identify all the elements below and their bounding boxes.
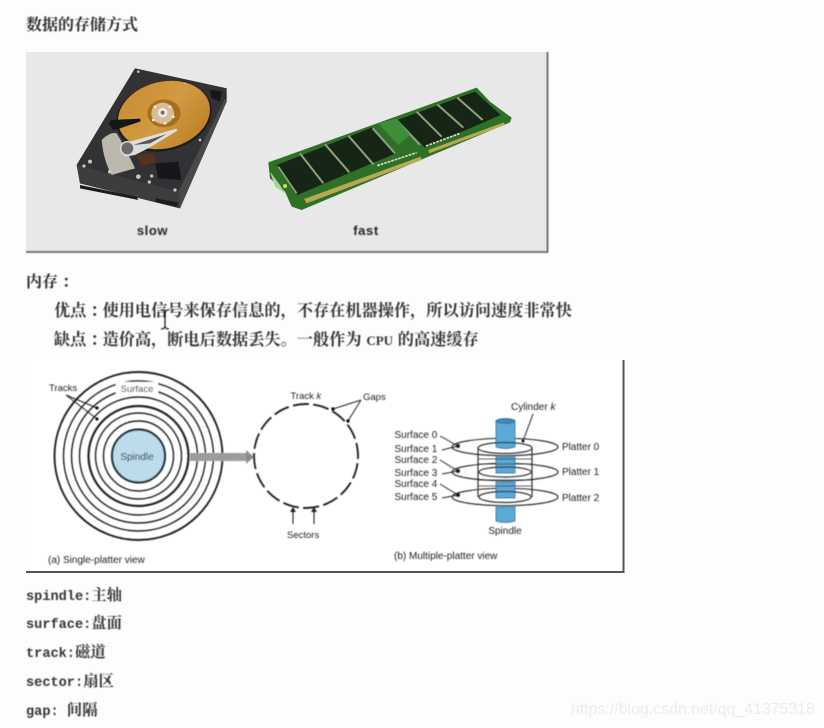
surface label backing	[116, 382, 158, 395]
diagram: multiple-platter view	[452, 418, 558, 522]
watermark: https://blog.csdn.net/qq_41375318	[571, 701, 815, 718]
label: gaps: Gaps	[363, 392, 386, 403]
platter 1	[452, 463, 558, 481]
icon: hard disk drive	[77, 68, 227, 208]
text: advantages: 优点：使用电信号来保存信息的，不存在机器操作，所以访问速度非常快	[54, 302, 572, 320]
label: track k: Track k	[290, 391, 323, 402]
arrow: zoom to track	[190, 450, 254, 464]
panel: storage hardware photos	[25, 51, 550, 254]
caption b: (b) Multiple-platter view	[394, 551, 498, 562]
term: surface: surface:盘面	[26, 611, 122, 633]
labels: surfaces: Surface 3	[394, 468, 438, 479]
labels: surfaces	[394, 430, 438, 503]
label: spindle b: Spindle	[488, 526, 522, 537]
diagram: single-platter view	[54, 372, 222, 540]
text: disadvantages: 缺点：造价高，断电后数据丢失。一般作为 CPU 的高速缓存	[54, 331, 479, 349]
labels: platters: Platter 1	[562, 467, 600, 478]
term: sector: sector:扇区	[26, 669, 114, 691]
labels: platters: Platter 0	[562, 442, 600, 453]
panel: disk geometry diagram	[26, 360, 624, 573]
title: 数据的存储方式	[26, 17, 138, 34]
diagram: track with sectors	[247, 397, 365, 515]
label: fast: fast	[353, 223, 379, 238]
term: track: track:磁道	[26, 640, 106, 662]
spindle disc	[112, 430, 165, 482]
term: spindle: spindle:主轴	[26, 583, 122, 605]
labels: platters: Platter 2	[562, 493, 600, 504]
icon: RAM memory module	[268, 88, 512, 210]
labels: surfaces: Surface 4	[394, 479, 438, 490]
heading: memory: 内存：	[26, 274, 78, 291]
platter 0	[452, 438, 558, 456]
label: tracks: Tracks	[49, 383, 77, 394]
label: cylinder k: Cylinder k	[511, 402, 556, 413]
label: surface: Surface	[121, 384, 153, 395]
cylinder	[478, 442, 532, 454]
label: sectors	[287, 507, 319, 541]
label: gaps	[331, 392, 386, 423]
surface leader lines	[440, 436, 460, 498]
panel frame	[26, 360, 624, 572]
labels: surfaces: Surface 1	[394, 444, 438, 455]
label: spindle: Spindle	[120, 452, 154, 463]
label: cylinder k	[511, 402, 556, 442]
label: slow: slow	[137, 223, 168, 238]
caption a: (a) Single-platter view	[48, 555, 145, 566]
term: gap: gap: 间隔	[26, 698, 98, 720]
spindle segments	[496, 418, 515, 522]
label: sectors: Sectors	[287, 530, 319, 541]
labels: surfaces: Surface 5	[394, 492, 438, 503]
labels: surfaces: Surface 0	[394, 430, 438, 441]
label: tracks	[49, 383, 99, 421]
labels: surfaces: Surface 2	[394, 455, 438, 466]
platter 2	[452, 488, 558, 506]
labels: platters	[562, 442, 600, 504]
icon: text cursor	[160, 308, 170, 330]
panel background	[26, 52, 548, 252]
